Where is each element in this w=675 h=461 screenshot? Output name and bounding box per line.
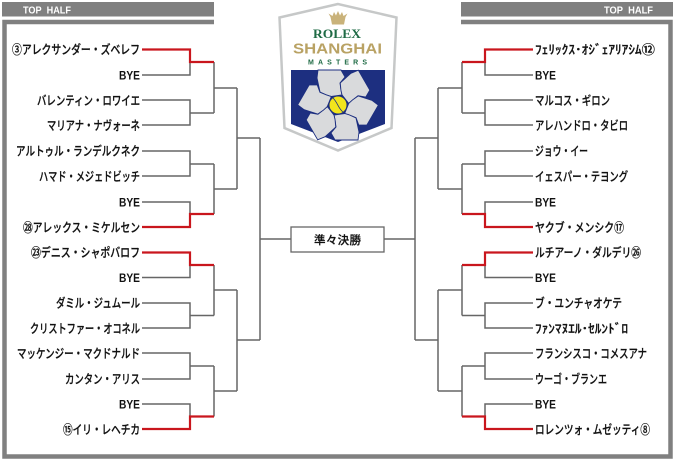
left player names: カンタン・アリス xyxy=(65,372,140,386)
left player names: アルトゥル・ランデルクネク xyxy=(16,144,140,158)
red winner paths right xyxy=(462,50,533,429)
right player names: BYE xyxy=(535,400,556,412)
logo text: MASTERS: MASTERS xyxy=(308,60,367,66)
left player names: ハマド・メジェドビッチ xyxy=(39,170,140,184)
left player names: BYE xyxy=(119,273,140,285)
left player names: BYE xyxy=(119,198,140,210)
right header bar: TOP HALF xyxy=(604,4,654,16)
icon: tennis ball xyxy=(329,96,347,114)
left player names: BYE xyxy=(119,400,140,412)
right player names xyxy=(535,42,656,437)
left player names: BYE xyxy=(119,70,140,82)
right player names: イェスパー・テヨング xyxy=(535,169,628,184)
right bracket lines xyxy=(384,50,533,429)
left player names: マリアナ・ナヴォーネ xyxy=(47,118,140,133)
right player names: BYE xyxy=(535,273,556,285)
right player names: ジョウ・イー xyxy=(535,144,588,158)
left player names: ダミル・ジュムール xyxy=(56,296,140,310)
right player names: BYE xyxy=(535,70,556,82)
center box: quarterfinal xyxy=(291,227,384,252)
right player names: ルチアーノ・ダルデリ㉖ xyxy=(535,245,641,260)
left bracket lines xyxy=(142,50,291,429)
center box: quarterfinal: 準々決勝 xyxy=(314,233,362,247)
left header bar: TOP HALF xyxy=(23,4,71,16)
left header bar xyxy=(2,2,214,16)
right player names: マルコス・ギロン xyxy=(535,94,610,108)
logo text: ROLEX: ROLEX xyxy=(313,27,361,41)
red winner paths left xyxy=(142,50,214,429)
right player names: ﾌｪﾘｯｸｽ･ｵｼﾞｪｱﾘｱｼﾑ⑫ xyxy=(535,42,656,57)
left player names: クリストファー・オコネル xyxy=(30,322,140,336)
logo text: SHANGHAI: SHANGHAI xyxy=(293,42,382,58)
right player names: BYE xyxy=(535,198,556,210)
icon: crown xyxy=(328,11,348,24)
left player names: ③アレクサンダー・ズベレフ xyxy=(12,42,140,57)
left player names: ㉓デニス・シャポバロフ xyxy=(31,245,140,260)
left player names: ⑮イリ・レヘチカ xyxy=(63,423,140,437)
left player names: ㉘アレックス・ミケルセン xyxy=(23,221,140,235)
logo emblem: navy panel with pinwheel xyxy=(291,69,385,142)
right player names: ウーゴ・ブランエ xyxy=(535,372,607,386)
left player names xyxy=(12,42,140,437)
right player names: ﾌｧﾝﾏﾇｴﾙ･ｾﾙﾝﾄﾞﾛ xyxy=(535,321,628,336)
logo: Rolex Shanghai Masters shield xyxy=(280,4,396,150)
right player names: ヤクブ・メンシク⑰ xyxy=(535,220,624,235)
left player names: マッケンジー・マクドナルド xyxy=(17,347,140,361)
right player names: アレハンドロ・タビロ xyxy=(535,119,628,133)
right header bar xyxy=(461,2,673,16)
left player names: バレンティン・ロワイエ xyxy=(37,94,140,108)
right player names: ブ・ユンチャオケテ xyxy=(535,296,622,310)
